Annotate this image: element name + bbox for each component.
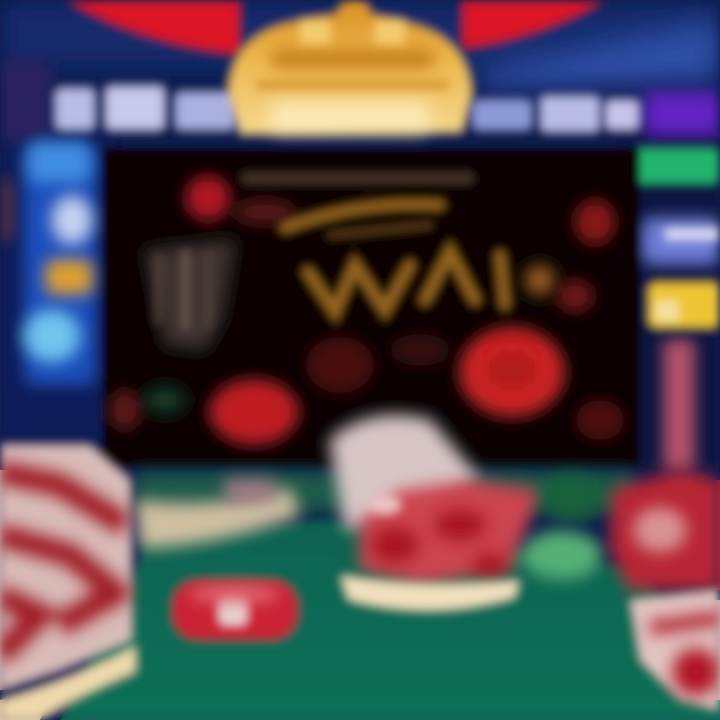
screen: main black display [102, 148, 640, 468]
small glows bottom [109, 390, 141, 430]
grey roulette basket [145, 240, 235, 350]
dim red glows center [306, 337, 374, 393]
chips: left stack [0, 445, 136, 720]
table: green felt [60, 472, 720, 720]
left panel: colored game signs [0, 142, 96, 385]
banner: white blurred lettering band [55, 86, 720, 136]
chips: right stack [610, 340, 720, 710]
red glow top-left [186, 176, 230, 220]
chips: center stack with cards [330, 416, 540, 611]
right panel: colored game signs [632, 148, 720, 328]
chips: front red stack [172, 580, 298, 640]
chips: green stack [522, 474, 602, 579]
screen heading glow [240, 172, 475, 184]
red chip left [210, 380, 298, 444]
red ceiling canopy [66, 0, 605, 55]
gold win lettering [285, 204, 505, 312]
chandelier [228, 0, 472, 134]
red chip right [460, 328, 564, 416]
red glow top-right [575, 200, 615, 244]
